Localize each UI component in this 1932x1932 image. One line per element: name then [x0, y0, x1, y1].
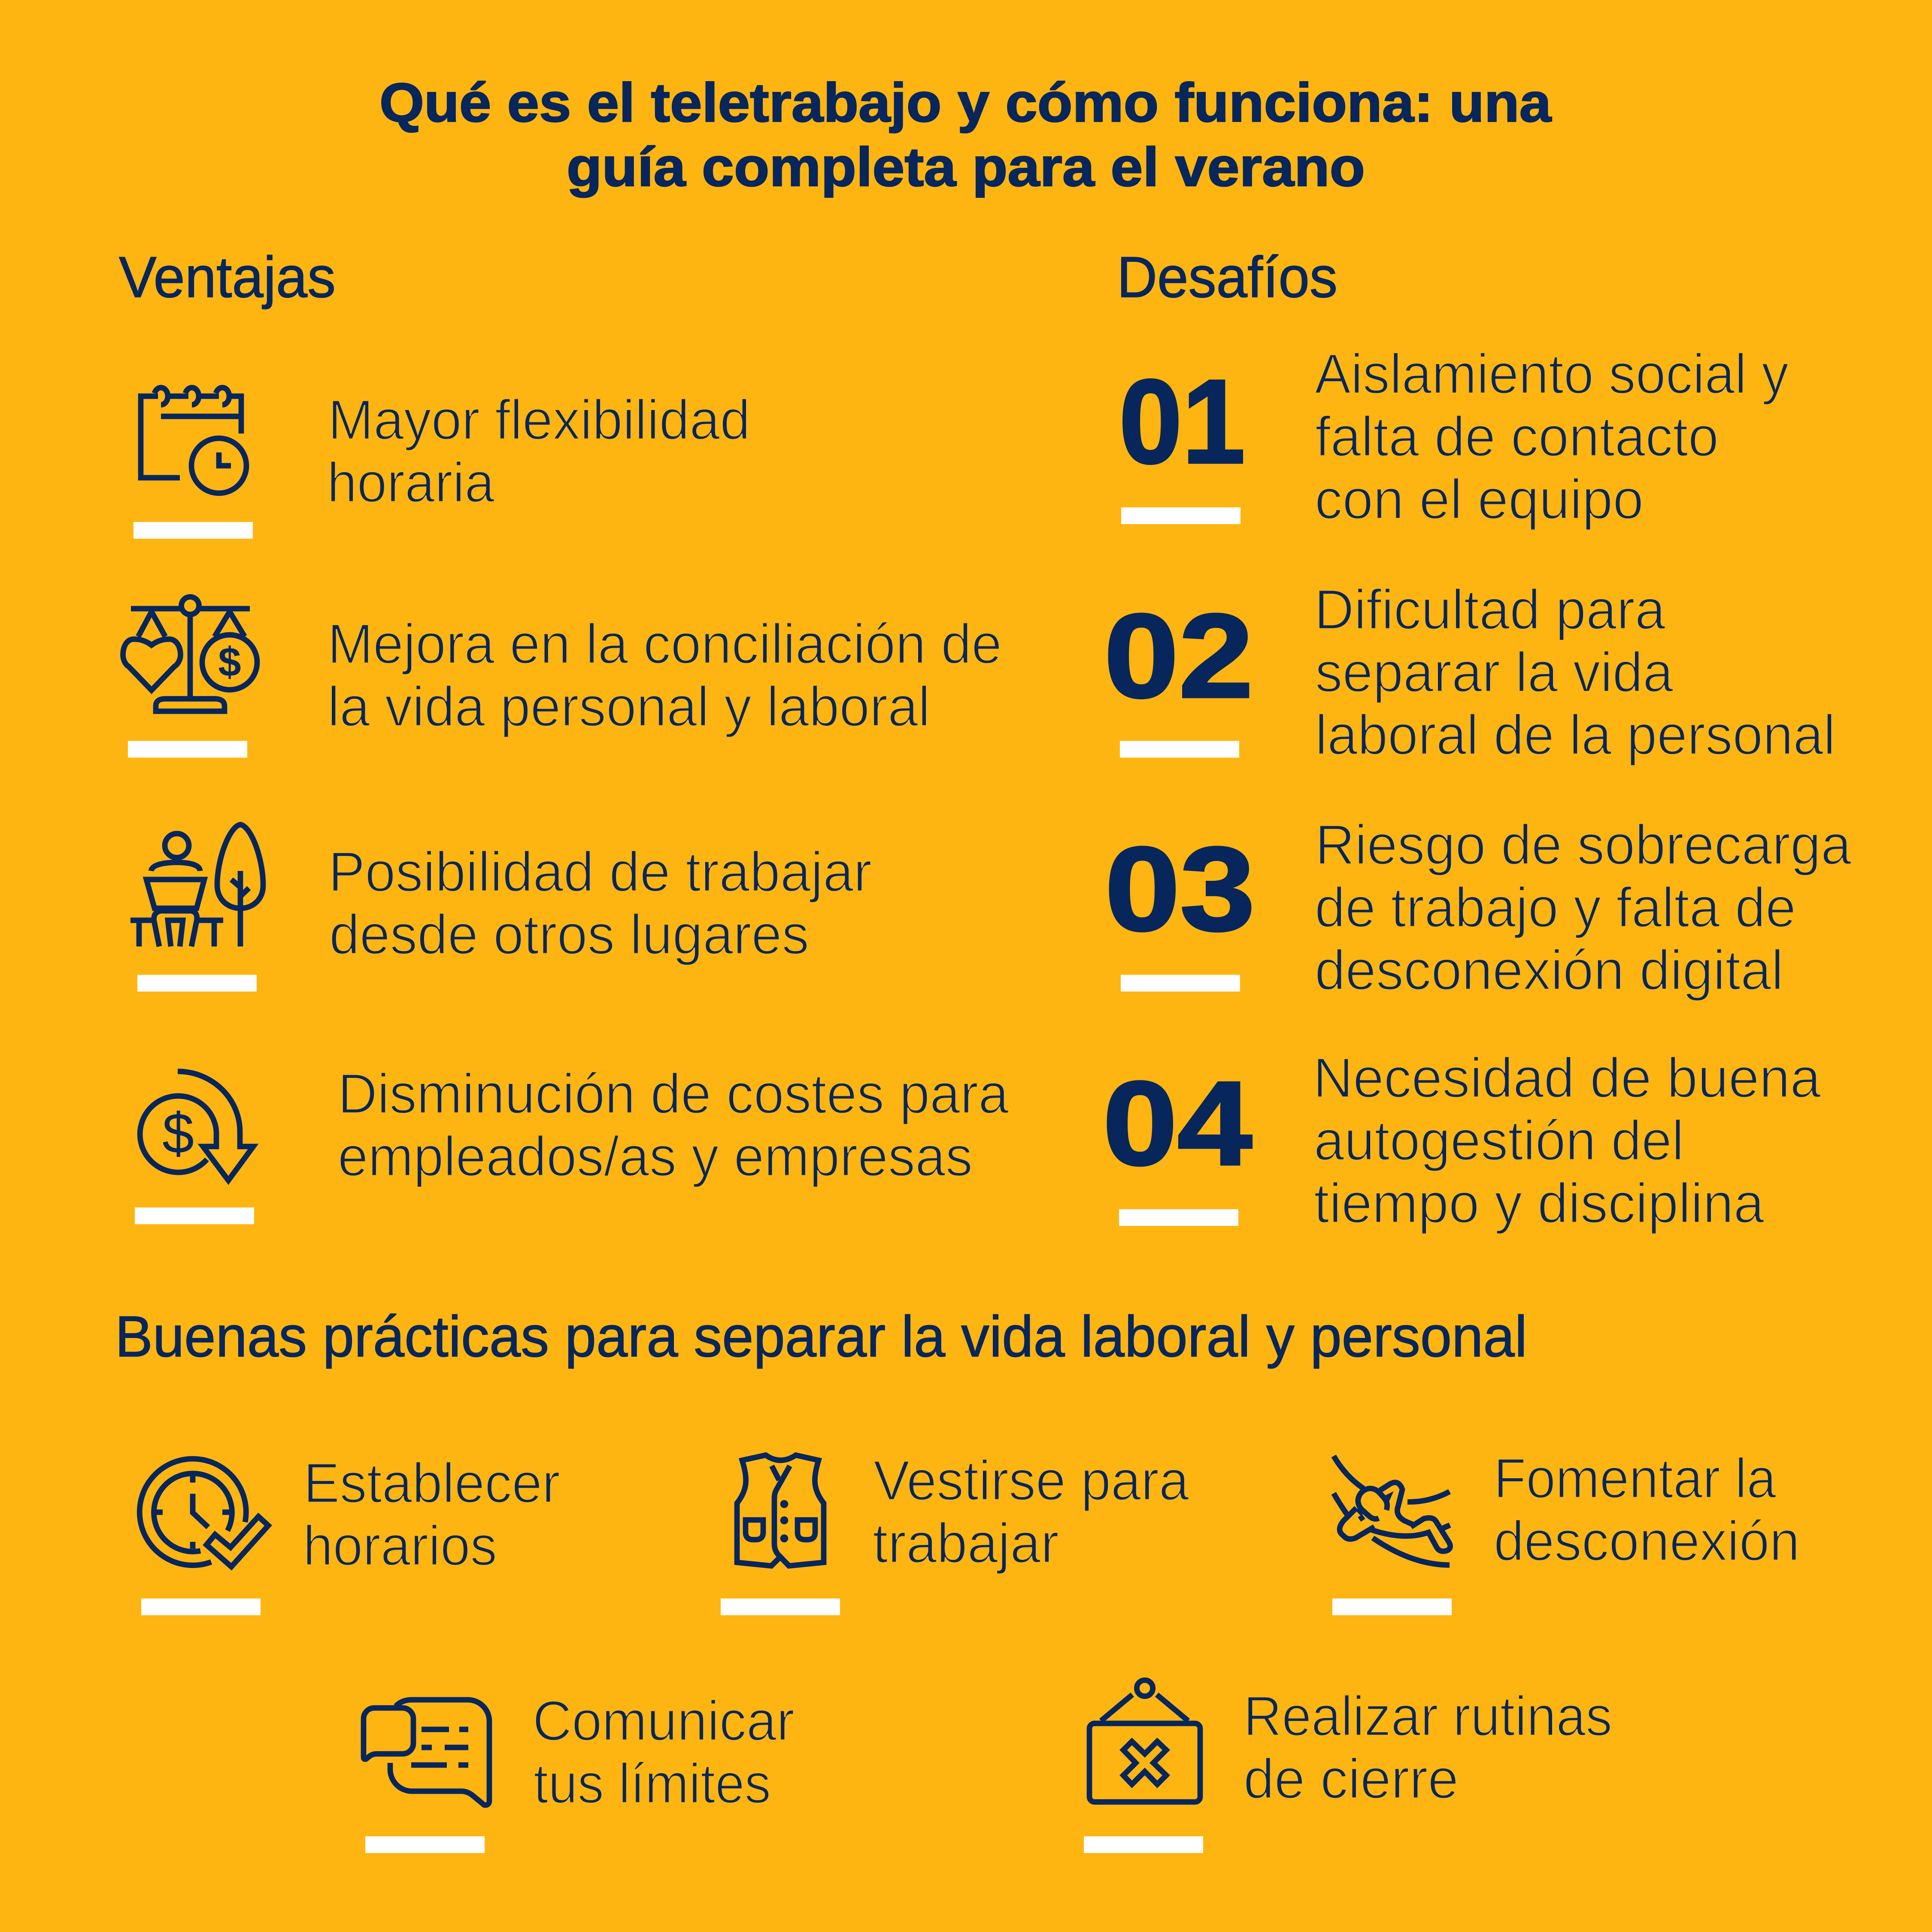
text: otros lugares: desde otros lugares	[329, 903, 809, 966]
text: vestirse para trabajar: Vestirse para	[873, 1449, 1189, 1512]
text: vestirse para trabajar: trabajar	[873, 1511, 1059, 1574]
icon: cost reduction arrow	[140, 1071, 253, 1180]
panel: desafíos	[1103, 342, 1851, 1234]
title	[379, 72, 1552, 198]
text: dificultad: laboral de la personal	[1315, 703, 1835, 766]
divider bar: desconexión	[1332, 1598, 1452, 1615]
icon: remote desk and tree	[130, 825, 263, 946]
divider bar 3	[137, 975, 257, 992]
icon: hammock wedge	[1385, 1491, 1394, 1501]
text: costes	[338, 1062, 1009, 1188]
text: riesgo: de trabajo y falta de	[1315, 876, 1796, 939]
text: fomentar la desconexión	[1494, 1447, 1800, 1572]
icon: vest	[737, 1455, 824, 1566]
text: riesgo: Riesgo de sobrecarga	[1315, 813, 1851, 876]
text: aislamiento	[1315, 342, 1789, 531]
panel: buenas prácticas	[140, 1447, 1800, 1853]
text: necesidad: Necesidad de buena	[1313, 1046, 1821, 1109]
title: Qué es el teletrabajo y cómo funciona: una	[379, 72, 1552, 133]
divider bar 2	[128, 741, 247, 758]
panel: ventajas	[123, 388, 1009, 1224]
divider bar 04	[1119, 1209, 1238, 1226]
text: necesidad: autogestión del	[1314, 1109, 1684, 1172]
text: costes: empleados/as y empresas	[338, 1125, 973, 1188]
text: otros lugares	[328, 840, 872, 966]
icon: clock with check	[140, 1459, 268, 1567]
text: vestirse para trabajar	[873, 1449, 1189, 1574]
icon: calendar with clock	[141, 388, 246, 493]
heading: Desafíos: Desafíos	[1117, 245, 1338, 309]
icon: person in hammock	[1334, 1456, 1450, 1565]
divider bar 02	[1120, 741, 1239, 758]
text: dificultad: Dificultad para	[1314, 578, 1665, 641]
icon: hanging closed sign	[1089, 1680, 1200, 1802]
text: fomentar la desconexión: Fomentar la	[1494, 1447, 1776, 1510]
divider bar 1	[133, 522, 253, 539]
text: fomentar la desconexión: desconexión	[1494, 1509, 1800, 1572]
divider bar: comunicar	[365, 1836, 485, 1853]
number 03: 03	[1105, 822, 1255, 955]
icon: dollar sign on scale: $	[218, 639, 241, 685]
number 01: 01	[1119, 355, 1245, 488]
text: dificultad	[1314, 578, 1835, 766]
number 02: 02	[1104, 589, 1253, 722]
heading: Ventajas: Ventajas	[119, 245, 336, 309]
text: rutinas de cierre: de cierre	[1244, 1747, 1459, 1810]
text: necesidad	[1313, 1046, 1821, 1234]
text: costes: Disminución de costes para	[338, 1062, 1009, 1125]
divider bar 03	[1121, 975, 1240, 992]
icon: vest buttons	[780, 1500, 788, 1542]
text: conciliación	[328, 612, 1002, 738]
text: riesgo: desconexión digital	[1315, 938, 1783, 1001]
text: otros lugares: Posibilidad de trabajar	[328, 840, 872, 903]
divider bar: vestirse	[721, 1598, 840, 1615]
text: flexibilidad: horaria	[327, 451, 494, 514]
text: comunicar límites	[533, 1689, 795, 1815]
icon: balance scale	[123, 597, 257, 711]
divider bar 4	[135, 1207, 254, 1224]
text: riesgo	[1315, 813, 1851, 1001]
divider bar: rutinas	[1084, 1836, 1203, 1853]
text: conciliación: la vida personal y laboral	[328, 675, 930, 738]
text: comunicar límites: Comunicar	[533, 1689, 795, 1752]
number 04: 04	[1103, 1056, 1253, 1190]
text: rutinas de cierre	[1244, 1684, 1612, 1810]
icon: dollar sign: $	[162, 1102, 194, 1165]
divider bar 01	[1121, 507, 1240, 524]
text: aislamiento: Aislamiento social y	[1315, 342, 1789, 405]
text: establecer horarios: Establecer	[303, 1451, 560, 1514]
text: rutinas de cierre: Realizar rutinas	[1244, 1684, 1612, 1747]
text: establecer horarios: horarios	[303, 1514, 497, 1577]
heading: Buenas prácticas: Buenas prácticas para separar la vida laboral y personal	[115, 1304, 1527, 1369]
text: dificultad: separar la vida	[1315, 640, 1673, 704]
text: aislamiento: con el equipo	[1315, 467, 1644, 531]
text: aislamiento: falta de contacto	[1315, 405, 1719, 468]
text: establecer horarios	[303, 1451, 560, 1577]
divider bar: horarios	[141, 1598, 261, 1615]
text: flexibilidad	[327, 388, 750, 514]
text: comunicar límites: tus límites	[534, 1752, 771, 1815]
text: flexibilidad: Mayor flexibilidad	[328, 388, 750, 451]
text: necesidad: tiempo y disciplina	[1314, 1171, 1764, 1234]
title: guía completa para el verano	[567, 136, 1365, 198]
icon: chat bubbles	[364, 1700, 489, 1805]
text: conciliación: Mejora en la conciliación de	[328, 612, 1002, 675]
